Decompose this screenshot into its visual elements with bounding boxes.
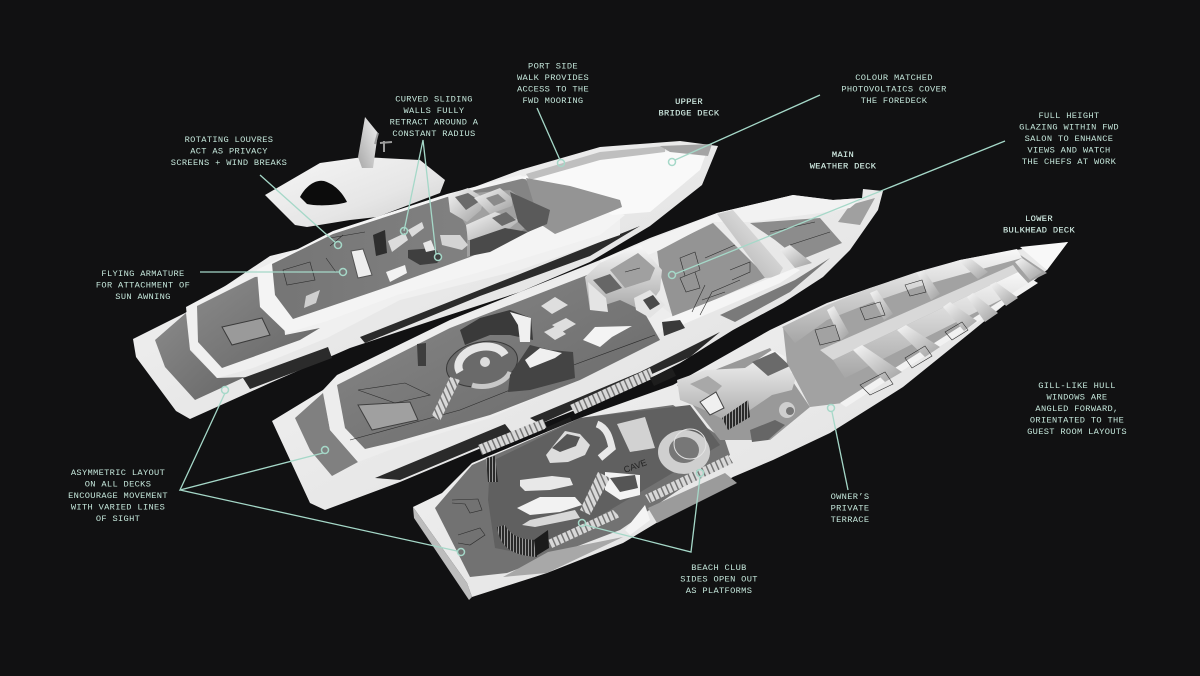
lower deck hull side xyxy=(413,507,472,600)
upper deck hull gaps xyxy=(243,226,640,389)
upper deck mid terrace xyxy=(186,175,620,378)
label: colour matched photovoltaics: THE FOREDECK xyxy=(861,96,928,106)
label: curved sliding walls: CURVED SLIDING xyxy=(395,94,473,104)
main aft deck xyxy=(337,270,660,449)
lower aft floor xyxy=(435,405,730,577)
label: rotating louvres: ROTATING LOUVRES xyxy=(185,135,273,145)
label: gill-like hull windows: ORIENTATED TO THE xyxy=(1030,416,1124,426)
upper side walk strip xyxy=(526,146,665,180)
main stair xyxy=(432,377,460,421)
label: full height glazing: FULL HEIGHT xyxy=(1039,111,1099,121)
label: port side walk: FWD MOORING xyxy=(523,96,583,106)
leader: asymmetric layout xyxy=(180,386,464,556)
label: flying armature: SUN AWNING xyxy=(115,292,171,302)
upper bridge deck yacht xyxy=(133,117,718,419)
label: beach club: BEACH CLUB xyxy=(691,563,747,573)
label: asymmetric layout: ENCOURAGE MOVEMENT xyxy=(68,491,168,501)
main side platform fore xyxy=(570,368,654,414)
label: curved sliding walls: WALLS FULLY xyxy=(404,106,465,116)
label: curved sliding walls: RETRACT AROUND A xyxy=(390,118,479,128)
main bulwark walls xyxy=(600,195,862,336)
leader: full height glazing xyxy=(668,141,1005,278)
lower folding platforms xyxy=(503,455,737,577)
main sketch furniture xyxy=(625,222,830,315)
label: rotating louvres: ACT AS PRIVACY xyxy=(190,146,268,156)
upper deck mid terrace floor xyxy=(197,275,320,368)
leader: port side walk xyxy=(537,108,564,166)
label: asymmetric layout: ON ALL DECKS xyxy=(85,480,151,490)
main deck outline marks xyxy=(350,335,655,440)
main lounge xyxy=(417,310,575,393)
owner's terrace xyxy=(810,380,848,405)
main side platform xyxy=(478,419,547,455)
label: beach club: SIDES OPEN OUT xyxy=(680,574,758,584)
lower cabin floors xyxy=(783,250,1047,407)
label: port side walk: PORT SIDE xyxy=(528,62,578,72)
label: owner's private terrace: TERRACE xyxy=(831,515,869,525)
label: curved sliding walls: CONSTANT RADIUS xyxy=(392,129,476,139)
label: full height glazing: GLAZING WITHIN FWD xyxy=(1019,122,1119,132)
roof skylight xyxy=(300,181,347,205)
main aft terrace xyxy=(323,263,680,462)
main hull side shadows xyxy=(375,332,720,480)
label: flying armature: FOR ATTACHMENT OF xyxy=(96,280,190,290)
lower cabin corridor walls xyxy=(820,265,1038,407)
label: full height glazing: SALON TO ENHANCE xyxy=(1025,134,1113,144)
main pool xyxy=(358,402,418,430)
upper deck furniture xyxy=(283,222,468,308)
main dark slot xyxy=(545,368,676,436)
mast radar xyxy=(375,133,392,152)
label: colour matched photovoltaics: COLOUR MATCHED xyxy=(855,73,933,83)
leader: owner's terrace xyxy=(828,404,848,490)
label: colour matched photovoltaics: PHOTOVOLTAICS COVER xyxy=(841,84,947,94)
heading: lower bulkhead deck: BULKHEAD DECK xyxy=(1003,226,1075,236)
label: port side walk: WALK PROVIDES xyxy=(517,73,589,83)
label: full height glazing: VIEWS AND WATCH xyxy=(1027,146,1111,156)
lower beach club furniture xyxy=(517,417,710,527)
label: port side walk: ACCESS TO THE xyxy=(517,84,589,94)
upper foredeck recess xyxy=(526,178,622,234)
heading: main weather deck: WEATHER DECK xyxy=(810,162,877,172)
roof mast xyxy=(358,117,378,168)
label: asymmetric layout: OF SIGHT xyxy=(96,514,140,524)
lower bow tip xyxy=(1020,242,1068,270)
main foredeck floors xyxy=(657,223,767,318)
lower cabin outer wall xyxy=(782,249,1022,343)
label: gill-like hull windows: GILL-LIKE HULL xyxy=(1038,381,1116,391)
label: gill-like hull windows: ANGLED FORWARD, xyxy=(1035,404,1119,414)
label: rotating louvres: SCREENS + WIND BREAKS xyxy=(171,158,287,168)
label: beach club: AS PLATFORMS xyxy=(686,586,752,596)
leader: photovoltaics xyxy=(668,95,820,166)
upper deck pool xyxy=(222,318,270,345)
lower terrace sketch xyxy=(452,499,485,545)
label: asymmetric layout: WITH VARIED LINES xyxy=(71,502,165,512)
lower beach club furniture: CAVE xyxy=(622,457,648,475)
upper deck stern platform xyxy=(155,313,245,400)
lower deck hull xyxy=(413,242,1068,597)
heading: upper bridge deck: UPPER xyxy=(675,97,703,107)
leader: flying armature xyxy=(200,268,346,276)
lower side pillar dark xyxy=(486,456,498,482)
upper bow detail xyxy=(660,144,712,156)
upper deck top floor xyxy=(272,178,553,319)
upper deck top terrace xyxy=(257,175,625,333)
main hull streaks xyxy=(720,258,830,322)
leader: rotating louvres xyxy=(260,175,342,248)
lower floor interior xyxy=(488,405,720,555)
lower curved suite walls xyxy=(677,348,822,442)
main weather deck yacht xyxy=(272,189,883,510)
upper deck hull xyxy=(133,141,718,419)
lower aft slatted screen xyxy=(497,525,537,557)
heading: upper bridge deck: BRIDGE DECK xyxy=(659,108,720,118)
main room block xyxy=(585,245,665,318)
label: gill-like hull windows: GUEST ROOM LAYOUTS xyxy=(1027,427,1127,437)
lower cabin cross walls xyxy=(827,258,1042,382)
main deck hull xyxy=(272,189,883,510)
lower bulkhead deck yacht xyxy=(413,242,1068,600)
label: owner's private terrace: PRIVATE xyxy=(831,504,869,514)
heading: lower bulkhead deck: LOWER xyxy=(1025,214,1053,224)
main dining tables xyxy=(541,297,632,347)
leader: beach club xyxy=(578,470,704,552)
label: gill-like hull windows: WINDOWS ARE xyxy=(1047,392,1107,402)
annotation leader lines xyxy=(180,95,1005,556)
upper deck roof canopy xyxy=(265,157,445,227)
label: owner's private terrace: OWNER’S xyxy=(831,492,869,502)
label: asymmetric layout: ASYMMETRIC LAYOUT xyxy=(71,468,165,478)
upper foredeck white panel xyxy=(518,148,708,215)
main stern wedge xyxy=(295,393,358,476)
heading: main weather deck: MAIN xyxy=(832,150,854,160)
label: full height glazing: THE CHEFS AT WORK xyxy=(1022,157,1117,167)
leader: curved sliding walls xyxy=(400,140,442,260)
lower dark aft end xyxy=(534,530,549,556)
upper deck room block xyxy=(448,188,550,257)
lower cabin sketches xyxy=(815,280,968,395)
label: flying armature: FLYING ARMATURE xyxy=(101,269,185,279)
